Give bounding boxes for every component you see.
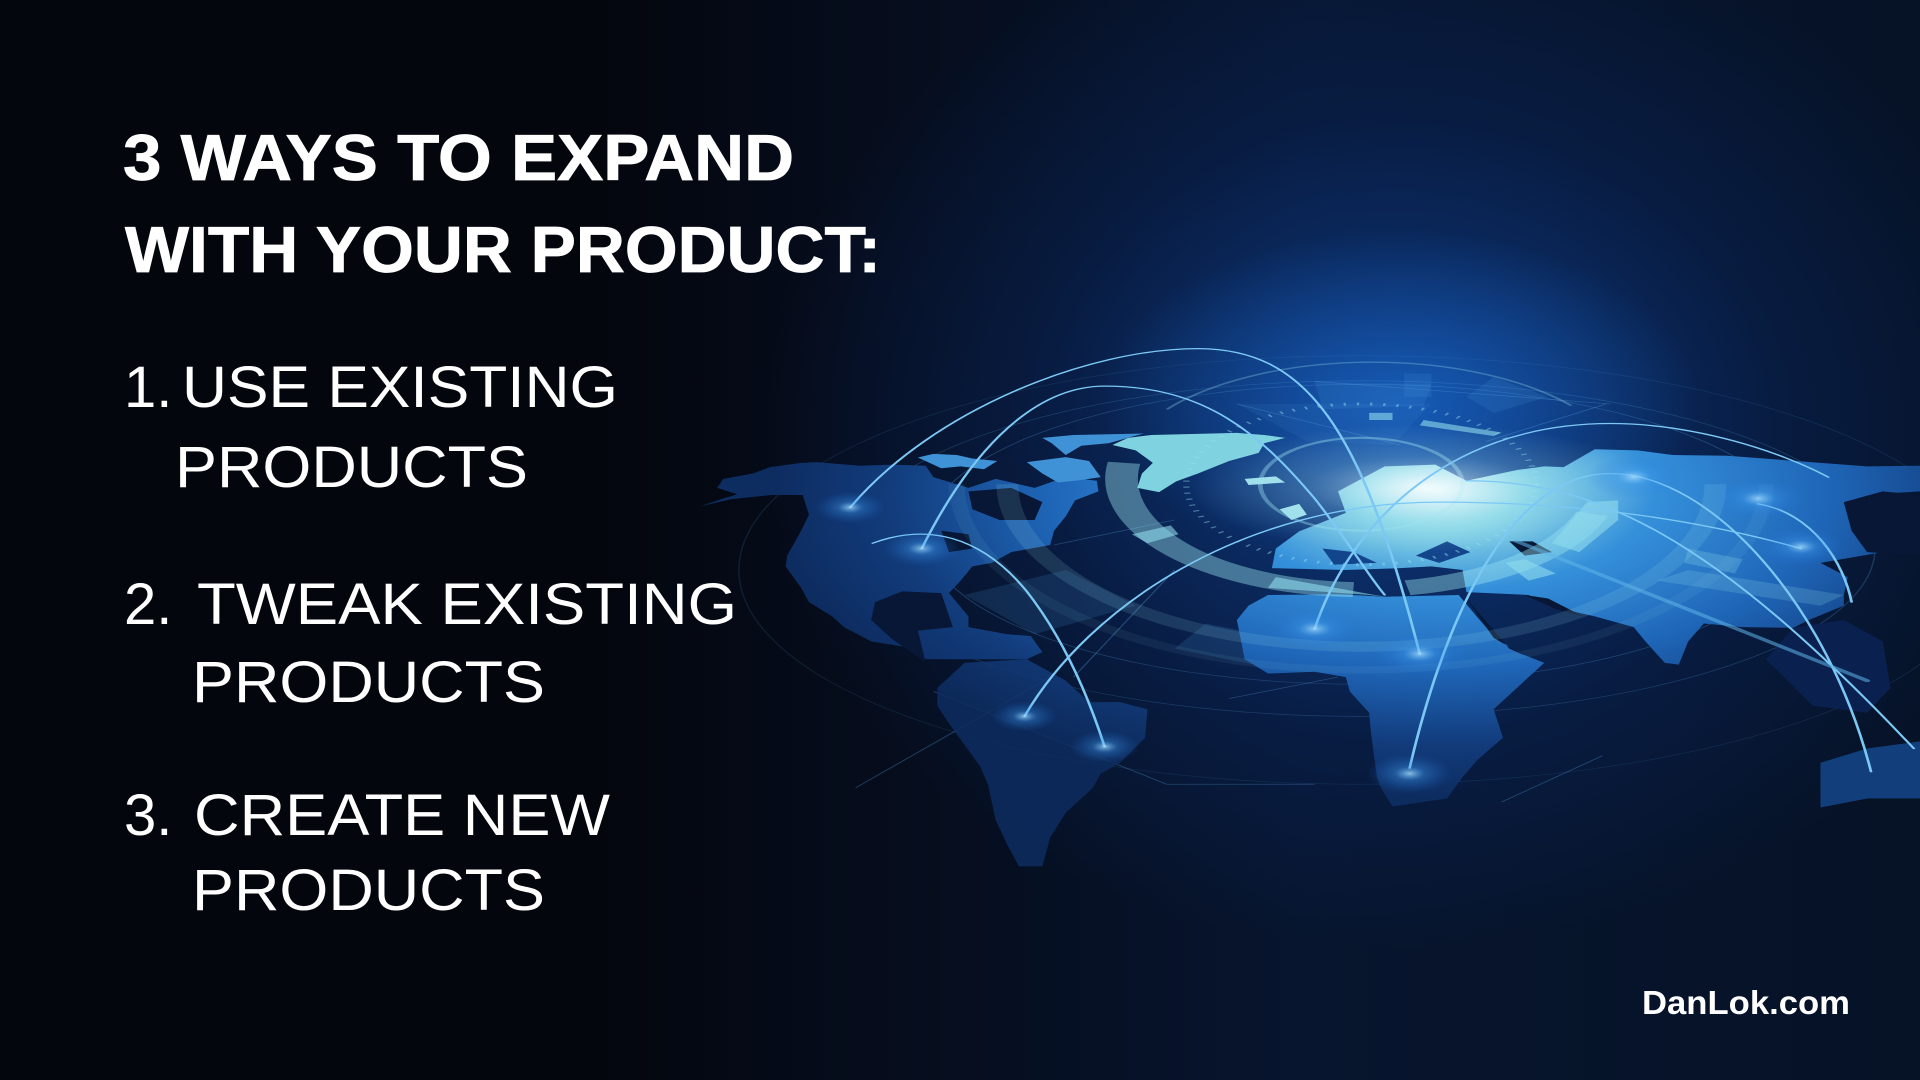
list item 1: 1. <box>124 355 172 420</box>
arctic islands <box>918 434 1307 520</box>
continent: Eurasia <box>1272 449 1920 665</box>
continent: Australia and islands <box>1820 741 1920 807</box>
list item 3: 3. <box>124 783 172 848</box>
list item 2: PRODUCTS <box>192 650 545 715</box>
list item 2 <box>124 572 737 715</box>
radar rings and grid <box>739 356 1920 802</box>
connection arcs <box>850 349 1914 772</box>
world map with network <box>700 349 1920 866</box>
dark cutouts: seas and bays <box>871 488 1920 713</box>
list item 1: USE EXISTING <box>182 355 618 420</box>
list item 1: PRODUCTS <box>175 435 528 500</box>
list item 3: PRODUCTS <box>192 858 545 923</box>
highlight bands <box>1132 413 1844 606</box>
radar band overlay <box>957 362 1766 670</box>
glowing network nodes <box>815 456 1844 793</box>
central glow <box>1190 424 1657 552</box>
list item 2: TWEAK EXISTING <box>197 572 737 637</box>
continent: North America <box>700 462 1098 659</box>
title <box>123 121 881 286</box>
list item 2: 2. <box>124 572 172 637</box>
list item 3: CREATE NEW <box>194 783 610 848</box>
title: 3 WAYS TO EXPAND <box>123 121 794 194</box>
list item 1 <box>124 355 618 500</box>
continent: Africa <box>1237 594 1544 806</box>
continent: South America <box>937 659 1147 866</box>
faint technology panels <box>965 374 1548 670</box>
website credit: DanLok.com <box>1642 984 1850 1021</box>
continent: Greenland <box>1112 433 1285 492</box>
list item 3 <box>124 783 610 923</box>
title: WITH YOUR PRODUCT: <box>125 213 881 286</box>
